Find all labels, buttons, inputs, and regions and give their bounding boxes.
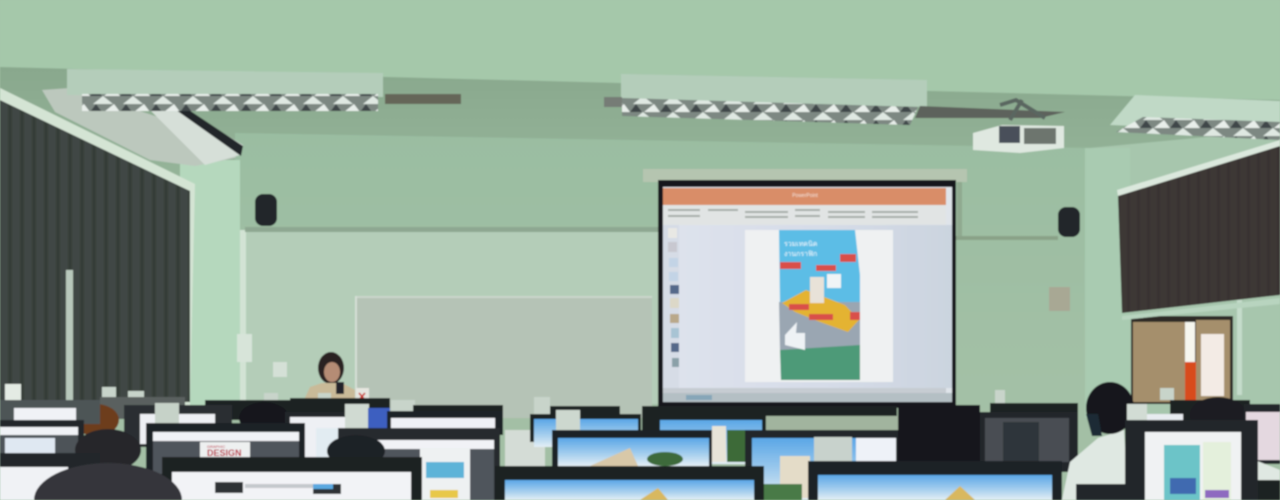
monitor A: [0, 400, 100, 424]
design software monitor: [980, 412, 1078, 472]
side rail: [953, 182, 1058, 240]
monitor F: [162, 457, 422, 500]
monitor D: graphic design: [146, 423, 305, 479]
monitor with infographic: [1125, 420, 1258, 500]
presenter: [304, 352, 369, 404]
powerpoint title bar: [663, 188, 946, 205]
monitor D: graphic design: DESIGN: [207, 448, 242, 458]
head: left middle: [75, 429, 141, 471]
student with mask: [1062, 382, 1134, 500]
ceiling light right: [1110, 95, 1280, 140]
ceiling beam: [0, 0, 1280, 100]
projection screen: [658, 180, 956, 408]
wall switches: [237, 287, 1070, 377]
infographic poster on slide: งานกราฟิก: [784, 250, 817, 258]
screen housing: [643, 169, 967, 182]
desk cards back row: [5, 384, 1174, 414]
front centre-left monitor: [495, 466, 764, 500]
front centre-right monitor: [808, 461, 1062, 500]
monitor J: [530, 410, 641, 447]
door: [1131, 300, 1242, 404]
ribbon: [663, 205, 946, 225]
monitor I: [387, 411, 503, 433]
head: centre: [327, 435, 385, 467]
monitor B: [124, 403, 232, 447]
monitor right edge: [1244, 404, 1280, 464]
student shoulder right: [1255, 460, 1280, 500]
slide workspace: [679, 225, 952, 388]
ceiling light centre: [604, 74, 1065, 125]
monitor H with document: [285, 404, 390, 461]
chair right: [1258, 480, 1280, 500]
head: back right: [1190, 397, 1246, 433]
powerpoint title bar: PowerPoint: [792, 193, 818, 199]
card centre: [505, 430, 545, 466]
black monitor: [898, 405, 980, 463]
head: front left: [34, 463, 182, 500]
loudspeaker right: [1058, 207, 1080, 237]
small screen right back: [1147, 414, 1183, 422]
monitor L: [552, 430, 712, 467]
head: back middle: [239, 402, 289, 434]
card right: [1127, 404, 1147, 422]
monitor D: graphic design: GRAPHIC: [207, 444, 225, 449]
right curtain: [1117, 140, 1280, 320]
taskbar: [663, 388, 952, 402]
back row dark monitors: [100, 397, 1250, 435]
infographic poster on slide: รวมเทคนิค: [784, 240, 818, 248]
monitor G with poster: [338, 428, 500, 500]
loudspeaker left: [255, 194, 277, 226]
projector: [973, 100, 1064, 153]
infographic poster on slide: [779, 230, 860, 380]
monitor K: [656, 414, 766, 464]
air conditioner: [42, 88, 243, 166]
monitor E: [0, 453, 100, 500]
slide page: [745, 230, 893, 382]
head: back left: [73, 404, 119, 436]
monitor C: [0, 420, 84, 460]
monitor M: [745, 430, 902, 500]
left curtains: [0, 88, 195, 405]
ceiling light left: [67, 69, 461, 111]
slide thumbnails: [663, 225, 680, 388]
left pillar: [180, 160, 240, 410]
whiteboard panel: [240, 227, 660, 418]
wall strip behind monitors: [766, 416, 898, 432]
